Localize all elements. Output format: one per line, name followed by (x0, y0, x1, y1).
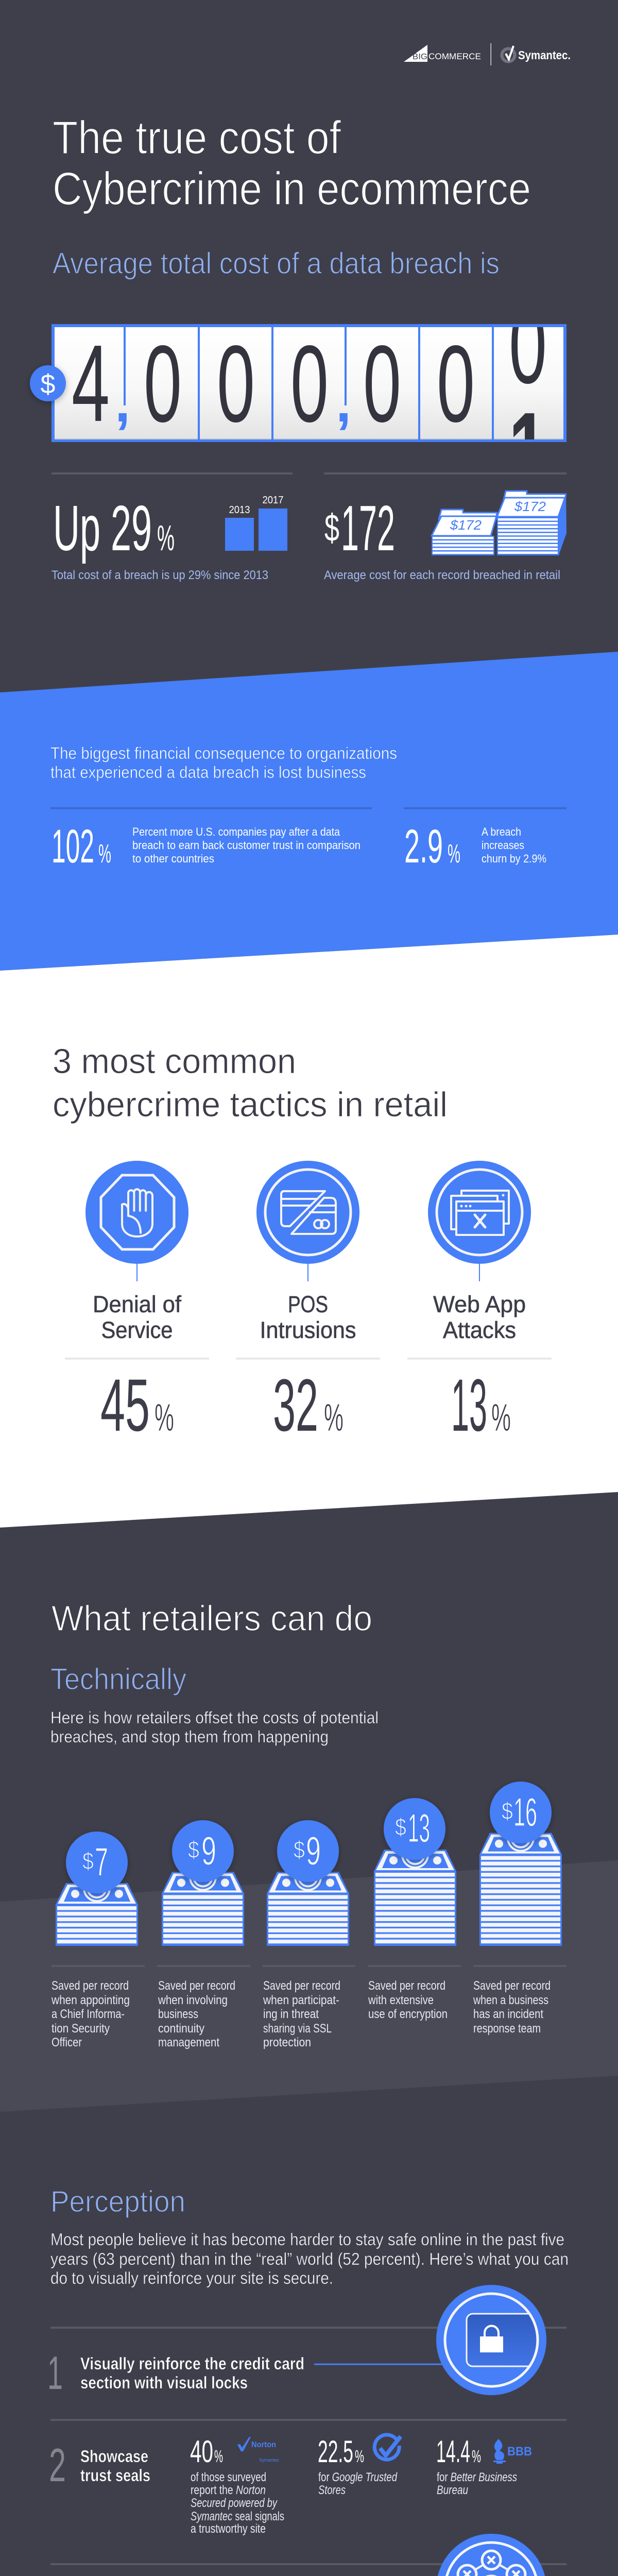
icon: BBB torch (493, 2439, 532, 2464)
coin: amount (384, 1798, 445, 1860)
icon: Google check badge (374, 2435, 401, 2460)
step 1: visual locks: 1 (47, 2347, 63, 2399)
stat: 172 dollars per record (324, 472, 566, 582)
heading: 3 most common tactics (53, 1042, 448, 1124)
savings column: 16 dollars (473, 1782, 566, 2036)
savings column: 9 dollars, continuity: management (158, 2036, 219, 2049)
stat: up 29 percent (52, 472, 293, 582)
stat: 2.9 percent: A breach (482, 825, 521, 838)
text block: perception intro (50, 2230, 569, 2287)
icon: split credit card (256, 1161, 359, 1281)
tactic: denial of service (65, 1161, 209, 1447)
text block: perception intro: do to visually reinforce your site is secure. (50, 2268, 333, 2287)
logo: BigCommerce (404, 45, 481, 62)
coin: amount: 9 (201, 1828, 216, 1873)
counter: 4,000,001 flip display: 0 (217, 323, 255, 445)
icon: dollar badge: $ (41, 369, 56, 399)
stat: 102 percent: Percent more U.S. companies pay after a data (132, 825, 340, 838)
bar chart: 2013 vs 2017: 2013 (229, 504, 250, 516)
step 2: trust seals: trust seals (80, 2466, 150, 2485)
stat: 102 percent: % (98, 839, 111, 868)
panel: lighter band behind savings stacks (0, 1860, 618, 2112)
counter: 4,000,001 flip display: 1 (509, 389, 547, 512)
stat: 102 percent: 102 (52, 820, 94, 873)
savings column: 13 dollars: Saved per record (368, 1979, 445, 1993)
coin: amount: 7 (95, 1839, 108, 1885)
heading: 3 most common tactics: cybercrime tactics in retail (53, 1085, 448, 1124)
seal stat: Google Trusted Stores 22.5 percent (318, 2434, 401, 2497)
tactic: POS intrusions: POS (288, 1291, 328, 1317)
heading: what retailers can do: What retailers can do (52, 1598, 372, 1638)
step 2: trust seals: 2 (49, 2439, 66, 2492)
stat: 2.9 percent: churn by 2.9% (482, 852, 546, 865)
icon: browser windows (428, 1161, 531, 1281)
tactic: denial of service: Denial of (93, 1291, 181, 1317)
seal stat: Norton 40 percent: Secured powered by (191, 2496, 278, 2510)
coin: amount: $ (188, 1836, 199, 1863)
tactic: web app attacks: % (491, 1396, 511, 1439)
icon: network of checks and crosses (436, 2534, 546, 2576)
icon: stop hand (85, 1161, 188, 1281)
stat: 2.9 percent: 2.9 (404, 820, 443, 873)
subheading: technically: Technically (50, 1663, 186, 1696)
seal stat: Google Trusted Stores 22.5 percent: Stores (318, 2483, 346, 2497)
icon: file folder stacks: $172 (450, 517, 482, 533)
tactic: POS intrusions: Intrusions (260, 1317, 356, 1343)
seal stat: Better Business Bureau 14.4 percent: for Better Business (437, 2470, 517, 2484)
icon: dollar badge (30, 365, 66, 401)
savings column: 9 dollars, threat sharing: sharing via SSL (263, 2022, 332, 2036)
seal stat: Better Business Bureau 14.4 percent: Bureau (437, 2483, 468, 2497)
icon: file folder stacks: $172 (514, 499, 546, 514)
savings column: 9 dollars, threat sharing (263, 1820, 355, 2049)
counter: 4,000,001 flip display: 0 (437, 323, 475, 445)
seal stat: Norton 40 percent: 40 (190, 2434, 213, 2469)
tactic: web app attacks (407, 1161, 552, 1447)
coin: amount (66, 1832, 128, 1893)
stat: up 29 percent: % (157, 518, 175, 558)
savings column: 16 dollars: when a business (473, 1993, 548, 2007)
panel: white tactics band background (0, 935, 618, 1528)
coin: amount (172, 1820, 234, 1882)
savings column: 9 dollars, continuity (157, 1820, 250, 2049)
logo: BigCommerce: BIG (413, 53, 427, 61)
logo: BigCommerce: COMMERCE (428, 52, 481, 61)
icon: BBB torch: BBB (507, 2445, 532, 2459)
seal stat: Google Trusted Stores 22.5 percent: 22.5 (318, 2434, 353, 2469)
counter: 4,000,001 flip display: 0 (290, 323, 329, 445)
savings column: 13 dollars: use of encryption (368, 2007, 448, 2021)
tactic: POS intrusions (236, 1161, 380, 1447)
savings column: 13 dollars: with extensive (368, 1993, 434, 2007)
stat: up 29 percent: Up 29 (53, 493, 152, 564)
savings column: 7 dollars: tion Security (52, 2022, 110, 2036)
seal stat: Norton 40 percent (190, 2434, 284, 2536)
text block: technically intro: Here is how retailers offset the costs of potential (50, 1708, 379, 1727)
stat: 2.9 percent: increases (482, 839, 524, 852)
logo: Symantec: Symantec. (518, 48, 571, 62)
logos (404, 43, 571, 65)
coin: amount: $ (395, 1814, 406, 1840)
bar chart: 2013 vs 2017: 2017 (263, 495, 283, 506)
text block: perception intro: years (63 percent) than in the “real” world (52 percent). Here’s what you can (50, 2249, 569, 2268)
logo: Symantec (502, 46, 571, 62)
counter: 4,000,001 flip display: 0 (363, 323, 401, 445)
icon: money stack (479, 1824, 562, 1946)
stat: 172 dollars per record: Average cost for each record breached in retail (324, 568, 560, 582)
tactic: POS intrusions: 32 (273, 1364, 318, 1447)
seal stat: Norton 40 percent: report the Norton (191, 2483, 266, 2497)
heading: biggest financial consequence (50, 744, 397, 782)
savings column: 16 dollars: has an incident (473, 2007, 543, 2021)
icon: money stack (267, 1863, 349, 1946)
subheading: perception: Perception (50, 2185, 185, 2218)
savings column: 7 dollars: when appointing (51, 1993, 130, 2007)
seal stat: Norton 40 percent: % (214, 2447, 223, 2466)
bar chart: 2013 vs 2017 (225, 495, 287, 551)
seal stat: Better Business Bureau 14.4 percent: 14.4 (436, 2434, 470, 2469)
title: The true cost of (53, 112, 341, 164)
stat: up 29 percent: Total cost of a breach is up 29% since 2013 (52, 568, 268, 582)
step 2: trust seals (49, 2419, 566, 2536)
icon: money stack (56, 1874, 138, 1946)
savings column: 7 dollars (51, 1832, 145, 2049)
heading: biggest financial consequence: that experienced a data breach is lost business (50, 763, 366, 782)
savings column: 9 dollars, threat sharing: Saved per record (263, 1979, 340, 1993)
tactic: denial of service: 45 (100, 1364, 150, 1447)
savings column: 9 dollars, threat sharing: protection (263, 2036, 311, 2049)
coin: amount (277, 1820, 339, 1882)
counter: 4,000,001 flip display: , (336, 371, 351, 433)
counter: 4,000,001 flip display: , (115, 371, 130, 433)
seal stat: Norton 40 percent: of those surveyed (191, 2470, 266, 2484)
icon: money stack (374, 1841, 456, 1946)
step 2: trust seals: Showcase (80, 2447, 148, 2466)
stat: 2.9 percent (404, 807, 566, 873)
counter: 4,000,001 flip display (52, 324, 566, 442)
stat: 102 percent: breach to earn back customer trust in comparison (132, 839, 360, 852)
stat: 102 percent: to other countries (132, 852, 214, 865)
tactic: web app attacks: 13 (451, 1364, 487, 1447)
seal stat: Better Business Bureau 14.4 percent: % (472, 2447, 481, 2466)
icon: file folder stacks (432, 491, 566, 555)
icon: Norton seal: Symantec (259, 2458, 279, 2463)
savings column: 9 dollars, continuity: Saved per record (158, 1979, 235, 1993)
counter: 4,000,001 flip display: 4 (72, 322, 110, 444)
icon: Norton seal (237, 2437, 279, 2463)
coin: amount: $ (502, 1798, 513, 1824)
step 1: visual locks: section with visual locks (80, 2373, 248, 2392)
stat: 2.9 percent: % (448, 839, 460, 868)
title: Cybercrime in ecommerce (53, 163, 531, 215)
text block: technically intro: breaches, and stop them from happening (50, 1727, 329, 1746)
coin: amount: 13 (408, 1805, 430, 1851)
savings column: 9 dollars, continuity: when involving (158, 1993, 228, 2007)
stat: 172 dollars per record: 172 (341, 493, 395, 564)
savings column: 9 dollars, threat sharing: ing in threat (263, 2007, 319, 2021)
text block: technically intro (50, 1708, 379, 1746)
counter: 4,000,001 flip display: 0 (144, 323, 182, 445)
coin: amount: $ (82, 1848, 94, 1874)
tactic: denial of service: % (154, 1396, 174, 1439)
savings column: 9 dollars, continuity: continuity (158, 2022, 204, 2036)
text block: perception intro: Most people believe it has become harder to stay safe online in the past five (50, 2230, 564, 2249)
savings column: 13 dollars (368, 1798, 461, 2021)
stat: 172 dollars per record: $ (324, 506, 339, 549)
seal stat: Better Business Bureau 14.4 percent (436, 2434, 532, 2497)
step 1: visual locks: Visually reinforce the credit card (80, 2354, 304, 2373)
savings column: 16 dollars: Saved per record (473, 1979, 551, 1993)
icon: locked card (436, 2285, 546, 2395)
savings column: 7 dollars: Saved per record (52, 1979, 129, 1993)
savings column: 16 dollars: response team (473, 2022, 541, 2036)
heading: biggest financial consequence: The biggest financial consequence to organizations (50, 744, 397, 762)
coin: amount: $ (294, 1836, 305, 1863)
stat: 102 percent (50, 807, 372, 873)
step 1: visual locks (47, 2285, 580, 2399)
icon: money stack (162, 1863, 244, 1946)
savings column: 7 dollars: Officer (52, 2036, 82, 2049)
seal stat: Norton 40 percent: a trustworthy site (191, 2522, 266, 2536)
tactic: web app attacks: Attacks (443, 1317, 516, 1343)
heading: 3 most common tactics: 3 most common (53, 1042, 296, 1081)
seal stat: Norton 40 percent: Symantec seal signals (191, 2510, 284, 2523)
step 3: layout quirks (49, 2534, 566, 2576)
coin: amount: 16 (513, 1789, 537, 1835)
title (53, 112, 531, 215)
savings column: 9 dollars, continuity: business (158, 2007, 198, 2021)
seal stat: Google Trusted Stores 22.5 percent: for Google Trusted (318, 2470, 398, 2484)
seal stat: Google Trusted Stores 22.5 percent: % (355, 2447, 364, 2466)
panel: blue consequence band background (0, 652, 618, 971)
subtitle: Average total cost of a data breach is (53, 247, 500, 280)
counter: 4,000,001 flip display: 0 (509, 284, 547, 406)
coin: amount: 9 (306, 1828, 321, 1873)
tactic: denial of service: Service (101, 1317, 173, 1343)
icon: Norton seal: Norton (251, 2441, 276, 2449)
tactic: POS intrusions: % (324, 1396, 344, 1439)
tactic: web app attacks: Web App (433, 1291, 526, 1317)
coin: amount (490, 1782, 552, 1843)
savings column: 9 dollars, threat sharing: when participat- (263, 1993, 339, 2007)
savings column: 7 dollars: a Chief Informa- (52, 2007, 125, 2021)
